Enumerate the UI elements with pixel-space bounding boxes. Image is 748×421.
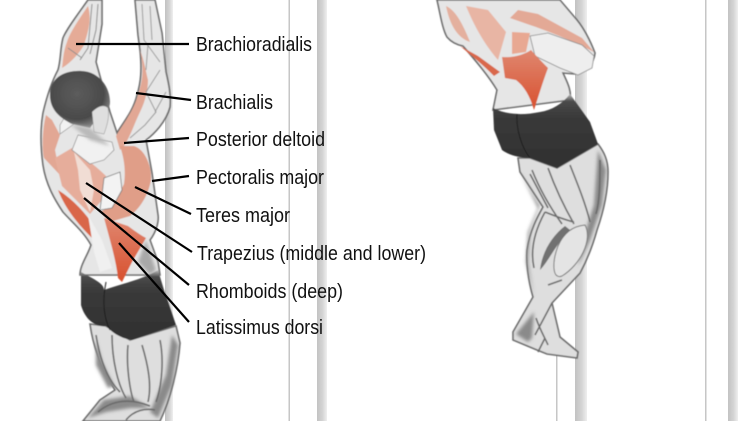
body silhouette [41,0,170,275]
shorts [81,270,176,340]
label: latissimus dorsi: Latissimus dorsi [196,317,323,339]
label: pectoralis major: Pectoralis major [196,167,324,189]
legs [513,144,608,358]
shorts [493,94,598,168]
legs [83,324,180,421]
leg muscle lines [530,160,600,352]
upper arm muscle [510,10,594,52]
left hand tendons [68,4,98,60]
label: posterior deltoid: Posterior deltoid [196,129,325,151]
forearm [530,33,594,75]
rear shoulder muscle [446,6,470,42]
latissimus dorsi [104,218,146,282]
teres major and posterior deltoid [100,146,151,222]
gym poles [165,0,738,421]
label: rhomboids: Rhomboids (deep) [196,281,343,303]
leg shading [516,150,606,342]
right arm shading [116,50,148,150]
figure: side view hanging [437,0,608,358]
leader lines [76,44,192,322]
label: trapezius: Trapezius (middle and lower) [197,243,426,265]
label: brachioradialis: Brachioradialis [196,34,312,56]
brachioradialis muscle [62,6,90,68]
rear lat edge [460,46,500,76]
latissimus dorsi side [502,50,548,110]
torso silhouette [437,0,595,110]
left deltoid and side [43,115,60,175]
lower left lat [58,190,94,238]
waist side shading [138,240,156,275]
label: teres major: Teres major [196,205,290,227]
figure: back view hanging [41,0,180,421]
upper back white area [72,135,114,164]
head [50,71,110,128]
label: brachialis: Brachialis [196,92,273,114]
neck fade [70,124,110,146]
trapezius and rhomboids [55,148,106,214]
muscle labels [196,34,426,339]
leg shading [88,335,178,418]
calf [554,225,587,277]
